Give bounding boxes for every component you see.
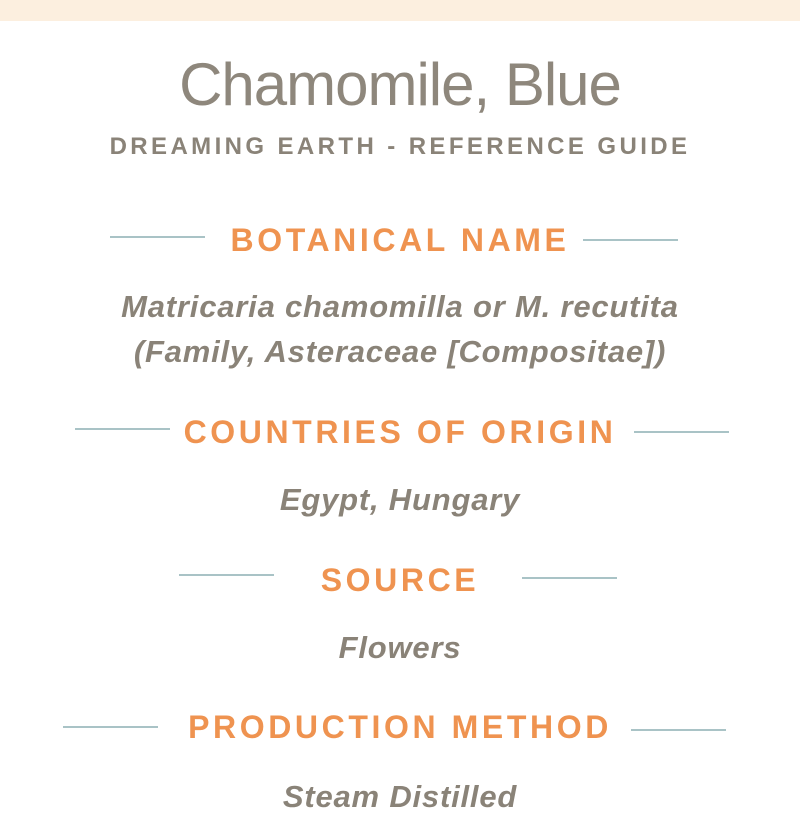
section: botanical name: (Family, Asteraceae [Compositae]) — [134, 334, 666, 369]
section: botanical name — [110, 222, 679, 369]
heading: source: SOURCE — [321, 562, 479, 598]
text: production: Steam Distilled — [283, 779, 517, 814]
heading: countries: COUNTRIES OF ORIGIN — [184, 414, 616, 450]
section: production method — [63, 709, 726, 814]
title: Chamomile, Blue — [179, 51, 621, 118]
heading: botanical name: BOTANICAL NAME — [230, 222, 569, 258]
text: countries: Egypt, Hungary — [280, 482, 520, 517]
text: botanical name: Matricaria chamomilla or M. recutita — [121, 289, 679, 324]
top banner — [0, 0, 800, 21]
text: source: Flowers — [339, 630, 461, 665]
heading: production: PRODUCTION METHOD — [188, 709, 612, 745]
subtitle: DREAMING EARTH - REFERENCE GUIDE — [110, 133, 690, 160]
section: source — [179, 562, 617, 665]
section: countries of origin — [75, 414, 729, 517]
